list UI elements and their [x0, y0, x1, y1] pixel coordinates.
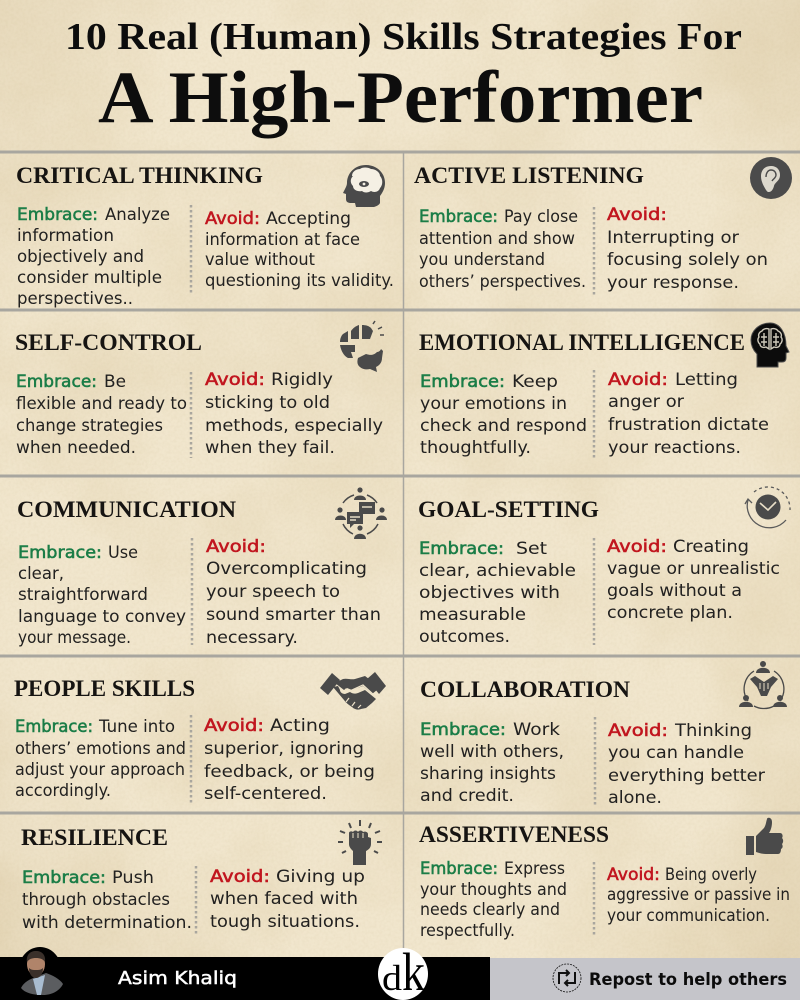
embrace text: Embrace:: [17, 205, 98, 224]
avoid text: frustration dictate: [608, 415, 769, 434]
embrace text: through obstacles: [22, 890, 170, 909]
embrace text: Keep: [512, 372, 558, 391]
avoid text: when faced with: [210, 889, 358, 908]
embrace text: [420, 372, 587, 457]
icon: three people joining hands: [739, 661, 787, 709]
heading: SELF-CONTROL: [15, 330, 202, 355]
avoid text: Being overly: [665, 865, 757, 884]
avoid text: goals without a: [607, 581, 742, 600]
author name: Asim Khaliq: [118, 968, 237, 989]
embrace text: when needed.: [16, 438, 136, 457]
avoid text: Avoid:: [206, 537, 266, 556]
avoid text: Giving up: [276, 867, 365, 886]
embrace text: information: [17, 226, 114, 245]
avoid text: anger or: [608, 392, 684, 411]
heading: RESILIENCE: [21, 825, 168, 850]
footer bar: [0, 942, 800, 1000]
avoid text: [204, 716, 375, 803]
avoid text: Rigidly: [271, 370, 333, 389]
embrace text: [15, 717, 186, 800]
embrace text: adjust your approach: [15, 760, 185, 779]
avoid text: Creating: [673, 537, 749, 556]
icon: repost: [553, 964, 581, 992]
icon: ear: [750, 157, 792, 199]
avoid text: your speech to: [206, 582, 340, 601]
avoid text: sticking to old: [205, 393, 330, 412]
avoid text: tough situations.: [210, 912, 360, 931]
avoid text: [607, 205, 768, 292]
embrace text: Embrace:: [420, 372, 505, 391]
icon: raised fist: [338, 820, 382, 865]
avoid text: questioning its validity.: [205, 271, 394, 290]
embrace text: Embrace:: [15, 717, 93, 736]
embrace text: [17, 205, 170, 308]
embrace text: objectively and: [17, 247, 144, 266]
heading: COLLABORATION: [420, 677, 630, 702]
avoid text: [205, 209, 394, 290]
avoid text: Letting: [675, 370, 738, 389]
panel: resilience: [21, 820, 382, 935]
avoid text: necessary.: [206, 628, 298, 647]
avoid text: Interrupting or: [607, 228, 739, 247]
avatar: [18, 947, 63, 997]
panel: people skills: [14, 672, 386, 805]
embrace text: clear, achievable: [419, 561, 576, 580]
avoid text: [206, 537, 381, 647]
avoid text: when they fail.: [205, 438, 335, 457]
avoid text: concrete plan.: [607, 603, 733, 622]
heading: COMMUNICATION: [17, 497, 236, 522]
icon: handshake: [320, 672, 386, 710]
embrace text: others’ perspectives.: [419, 272, 586, 291]
icon: head with brain: [343, 165, 385, 207]
heading: GOAL-SETTING: [418, 497, 599, 522]
avoid text: Thinking: [674, 721, 752, 740]
embrace text: Be: [104, 372, 126, 391]
embrace text: thoughtfully.: [420, 438, 531, 457]
embrace text: Set: [516, 539, 548, 558]
panel: communication: [17, 487, 387, 647]
embrace text: needs clearly and: [420, 900, 560, 919]
icon: clock with circular arrow: [745, 487, 790, 528]
heading: PEOPLE SKILLS: [14, 676, 195, 701]
avoid text: Avoid:: [608, 721, 668, 740]
avoid text: Avoid:: [607, 205, 667, 224]
panel: emotional intelligence: [419, 323, 789, 458]
embrace text: Embrace:: [420, 859, 498, 878]
embrace text: outcomes.: [419, 627, 510, 646]
heading: ACTIVE LISTENING: [414, 163, 644, 188]
avoid text: Acting: [270, 716, 330, 735]
heading: EMOTIONAL INTELLIGENCE: [419, 330, 745, 355]
logo: d: [382, 958, 402, 998]
embrace text: well with others,: [420, 742, 564, 761]
avoid text: Overcomplicating: [206, 559, 367, 578]
avoid text: Avoid:: [205, 370, 265, 389]
avoid text: information at face: [205, 230, 360, 249]
avoid text: [210, 867, 365, 931]
icon: thumbs up: [746, 818, 783, 855]
embrace text: Embrace:: [22, 868, 106, 887]
avoid text: Avoid:: [608, 370, 668, 389]
avoid text: everything better: [608, 766, 765, 785]
avoid text: your response.: [607, 273, 739, 292]
avoid text: [607, 537, 780, 622]
embrace text: straightforward: [18, 585, 148, 604]
embrace text: your message.: [18, 628, 131, 647]
avoid text: Avoid:: [210, 867, 270, 886]
embrace text: respectfully.: [420, 921, 515, 940]
embrace text: Embrace:: [419, 207, 498, 226]
avoid text: Avoid:: [607, 865, 660, 884]
embrace text: objectives with: [419, 583, 560, 602]
embrace text: [18, 543, 186, 647]
panel: self-control: [15, 321, 384, 458]
avoid text: feedback, or being: [204, 762, 375, 781]
avoid text: Avoid:: [607, 537, 667, 556]
logo: [378, 942, 428, 1000]
embrace text: [419, 539, 576, 646]
embrace text: measurable: [419, 605, 526, 624]
avoid text: [205, 370, 383, 457]
panel: collaboration: [420, 661, 787, 807]
embrace text: Embrace:: [419, 539, 504, 558]
avoid text: methods, especially: [205, 416, 383, 435]
avoid text: alone.: [608, 788, 662, 807]
embrace text: and credit.: [420, 786, 514, 805]
heading: CRITICAL THINKING: [16, 163, 263, 188]
repost label: Repost to help others: [589, 970, 787, 990]
title: [65, 16, 742, 139]
embrace text: Analyze: [105, 205, 170, 224]
embrace text: [22, 868, 192, 932]
avoid text: [607, 865, 790, 925]
avoid text: your communication.: [607, 906, 770, 925]
embrace text: Work: [513, 720, 560, 739]
panel: assertiveness: [419, 818, 790, 940]
embrace text: Tune into: [98, 717, 175, 736]
embrace text: accordingly.: [15, 781, 111, 800]
embrace text: check and respond: [420, 416, 587, 435]
title: 10 Real (Human) Skills Strategies For: [65, 16, 742, 58]
avoid text: [608, 721, 765, 807]
embrace text: Embrace:: [18, 543, 102, 562]
avoid text: Accepting: [266, 209, 351, 228]
embrace text: consider multiple: [17, 268, 162, 287]
embrace text: Use: [108, 543, 138, 562]
avoid text: sound smarter than: [206, 605, 381, 624]
embrace text: Express: [504, 859, 565, 878]
icon: self-control pie and speech: [340, 321, 384, 372]
avoid text: you can handle: [608, 743, 744, 762]
avoid text: Avoid:: [204, 716, 264, 735]
panel: goal-setting: [418, 487, 790, 646]
embrace text: others’ emotions and: [15, 739, 186, 758]
panel: critical thinking: [16, 163, 394, 308]
embrace text: language to convey: [18, 607, 186, 626]
embrace text: sharing insights: [420, 764, 556, 783]
embrace text: Push: [112, 868, 154, 887]
panel: active listening: [414, 157, 792, 295]
title: A High-Performer: [98, 57, 703, 139]
embrace text: perspectives..: [17, 289, 133, 308]
embrace text: [420, 859, 567, 940]
embrace text: your thoughts and: [420, 880, 567, 899]
heading: ASSERTIVENESS: [419, 822, 609, 847]
avoid text: vague or unrealistic: [607, 559, 780, 578]
icon: head with brain: [751, 323, 789, 367]
icon: people and speech bubbles: [335, 487, 387, 539]
embrace text: flexible and ready to: [16, 394, 187, 413]
embrace text: clear,: [18, 564, 64, 583]
embrace text: change strategies: [16, 416, 163, 435]
embrace text: attention and show: [419, 229, 575, 248]
embrace text: Pay close: [504, 207, 578, 226]
embrace text: [16, 372, 187, 457]
embrace text: [420, 720, 564, 805]
avoid text: superior, ignoring: [204, 739, 364, 758]
avoid text: self-centered.: [204, 784, 327, 803]
avoid text: focusing solely on: [607, 250, 768, 269]
avoid text: value without: [205, 250, 316, 269]
embrace text: with determination.: [22, 913, 192, 932]
embrace text: Embrace:: [16, 372, 97, 391]
embrace text: your emotions in: [420, 394, 567, 413]
embrace text: you understand: [419, 250, 545, 269]
embrace text: [419, 207, 586, 291]
avoid text: your reactions.: [608, 438, 741, 457]
embrace text: Embrace:: [420, 720, 506, 739]
avoid text: Avoid:: [205, 209, 260, 228]
avoid text: [608, 370, 769, 457]
